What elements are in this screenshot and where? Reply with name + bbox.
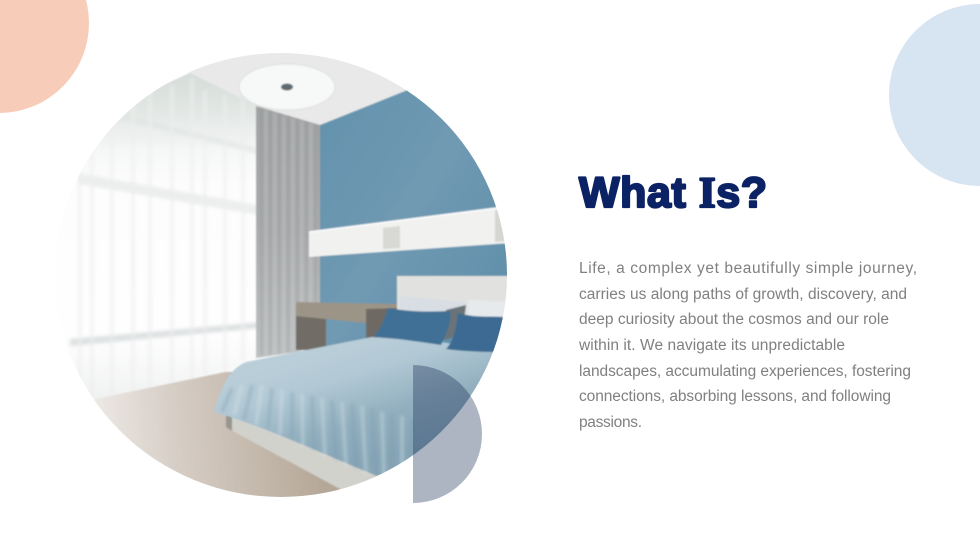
body paragraph: Life, a complex yet beautifully simple journey, xyxy=(579,260,917,277)
bed with blanket xyxy=(214,337,510,490)
title: What Is? xyxy=(579,169,767,217)
body paragraph: within it. We navigate its unpredictable xyxy=(578,337,845,354)
grey drape xyxy=(256,106,320,358)
wall shelf xyxy=(309,207,510,257)
blue wall xyxy=(319,90,507,347)
body paragraph: connections, absorbing lessons, and following xyxy=(579,388,891,405)
ceiling xyxy=(190,53,406,124)
body paragraph: carries us along paths of growth, discovery, and xyxy=(579,286,907,303)
sheer curtains over window xyxy=(40,73,262,399)
headboard xyxy=(396,274,507,316)
body paragraph: deep curiosity about the cosmos and our role xyxy=(579,311,889,328)
body paragraph: landscapes, accumulating experiences, fostering xyxy=(579,363,911,380)
decorative peach quarter circle xyxy=(0,0,89,113)
circular bedroom photo xyxy=(68,53,507,497)
ceiling lamp xyxy=(239,64,335,110)
decorative light blue circle xyxy=(889,4,980,186)
translucent navy half circle xyxy=(413,365,482,503)
floor xyxy=(94,371,342,497)
desk xyxy=(296,302,397,350)
body paragraph xyxy=(578,260,917,431)
body paragraph: passions. xyxy=(579,414,642,431)
pillows xyxy=(373,296,510,352)
